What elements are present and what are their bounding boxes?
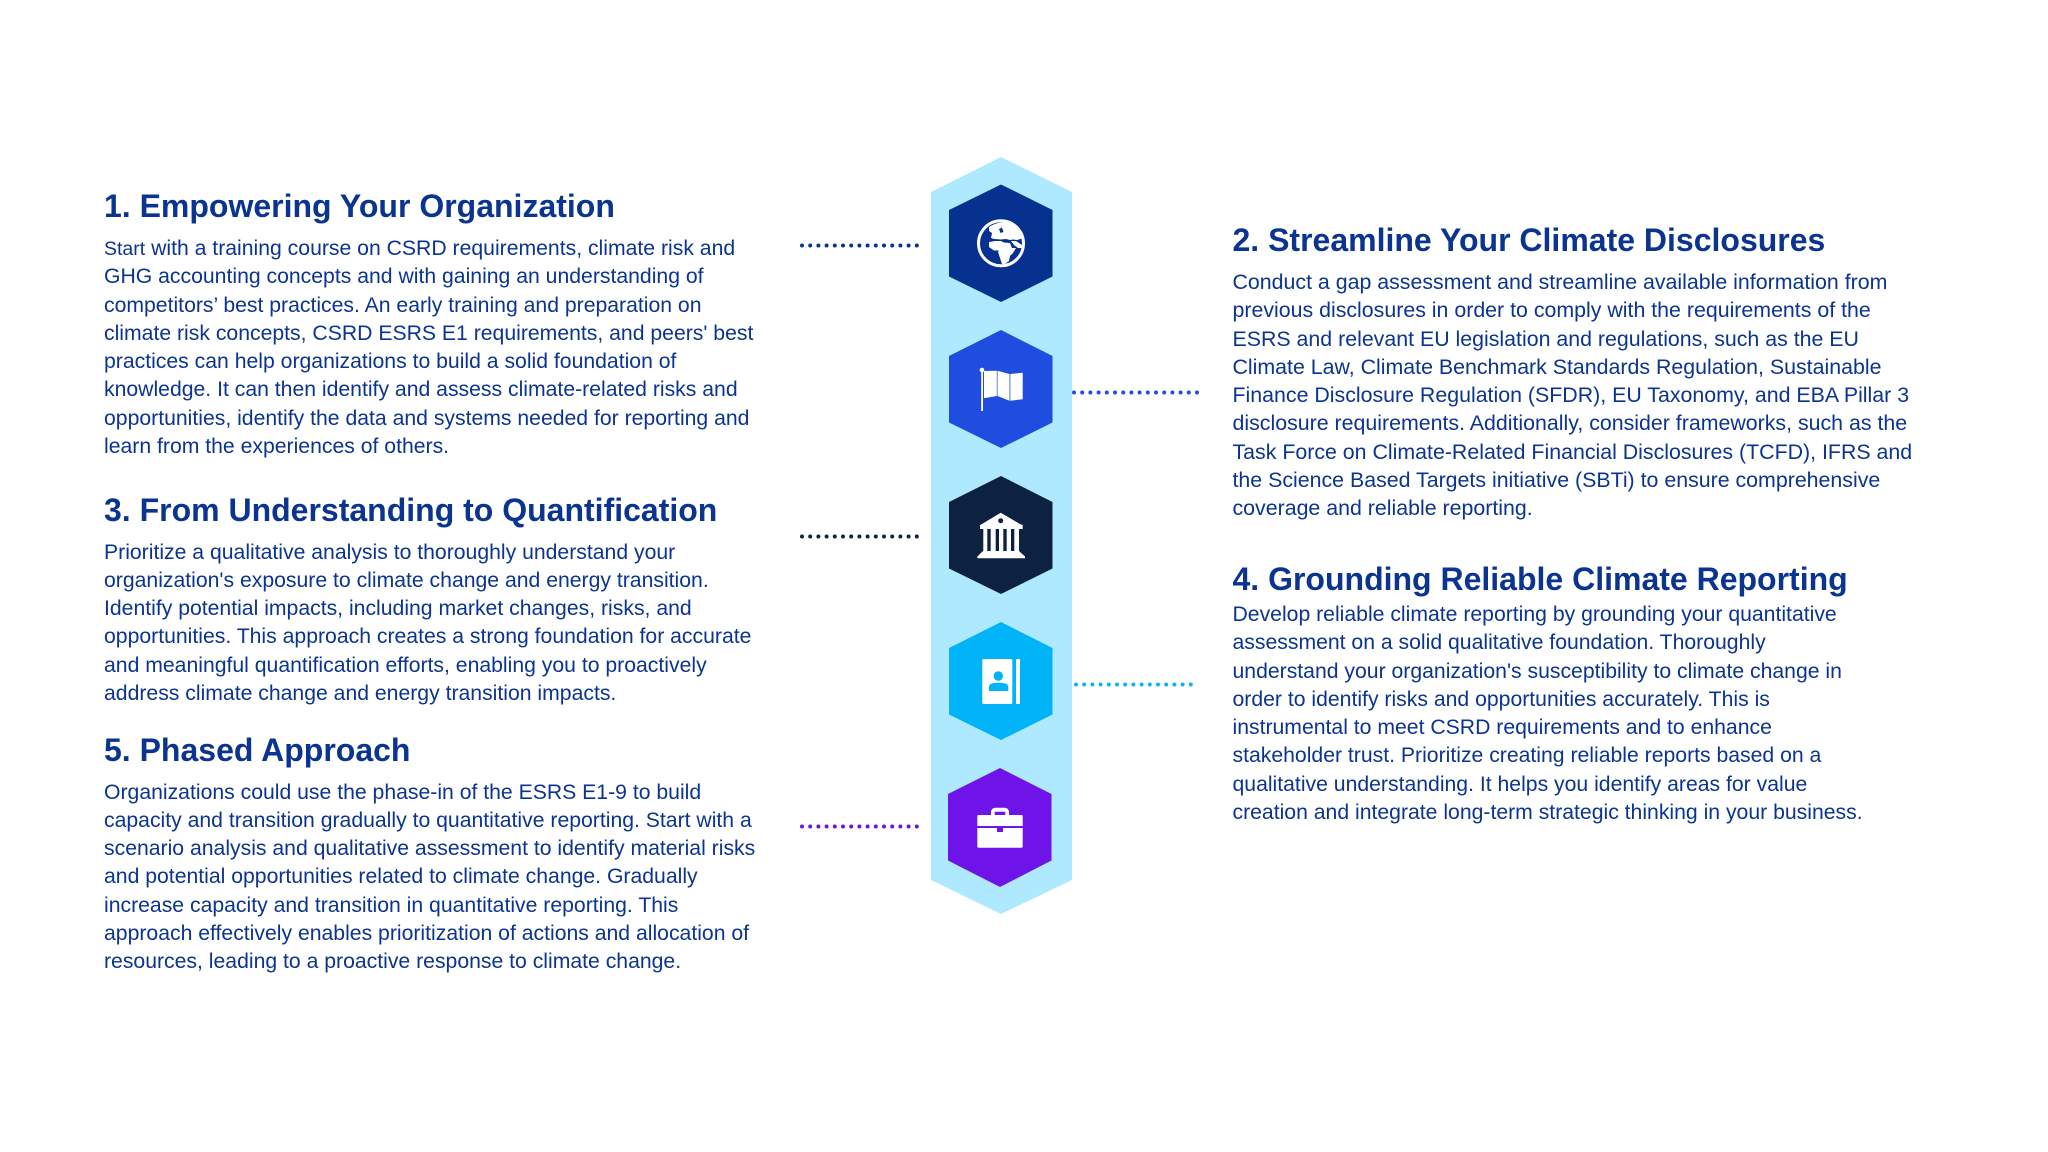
hexagon: bank icon — [949, 476, 1052, 594]
text: section 1 body: opportunities, identify the data and systems needed for reporting and — [104, 406, 749, 430]
text: section 5 body: approach effectively enables prioritization of actions and allocation of — [104, 922, 749, 945]
text: section 2 body: the Science Based Targets initiative (SBTi) to ensure comprehensive — [1232, 468, 1880, 492]
text: section 5 body: capacity and transition gradually to quantitative reporting. Start with a — [104, 809, 752, 832]
dotted connector: section 2 — [1074, 390, 1201, 394]
hexagon: globe icon — [949, 184, 1052, 302]
text: section 2 body: disclosure requirements. Additionally, consider frameworks, such as the — [1232, 411, 1907, 435]
text: section 4 body — [1232, 603, 1863, 824]
text: section 5 body: scenario analysis and qualitative assessment to identify material risks — [104, 837, 755, 860]
text: section 3 body — [104, 540, 751, 705]
text: section 5 body — [104, 780, 755, 973]
text: section 2 body: previous disclosures in order to comply with the requirements of the — [1232, 298, 1871, 322]
text: section 3 body: opportunities. This approach creates a strong foundation for accurate — [104, 625, 751, 648]
dotted connector: section 3 — [802, 534, 917, 538]
text: section 5 body: resources, leading to a proactive response to climate change. — [104, 950, 681, 973]
text: section 4 body: stakeholder trust. Prioritize creating reliable reports based on a — [1232, 744, 1821, 767]
text: section 5 body: Organizations could use the phase-in of the ESRS E1-9 to build — [104, 780, 701, 804]
text: section 3 body: organization's exposure to climate change and energy transition. — [104, 569, 709, 592]
text: section 2 body: Conduct a gap assessment and streamline available information from — [1232, 270, 1887, 294]
text: section 1 body: climate risk concepts, CSRD ESRS E1 requirements, and peers' best — [104, 322, 753, 345]
text: section 4 body: understand your organization's susceptibility to climate change in — [1232, 660, 1842, 682]
text: section 4 body: instrumental to meet CSRD requirements and to enhance — [1232, 716, 1772, 739]
dotted connector: section 5 — [802, 824, 917, 828]
text: section 4 body: order to identify risks and opportunities accurately. This is — [1232, 688, 1770, 711]
heading: section 1: 1. Empowering Your Organization — [104, 188, 615, 224]
text: section 4 body: Develop reliable climate reporting by grounding your quantitative — [1232, 603, 1837, 626]
hexagon: address book icon — [949, 622, 1052, 740]
text: section 1 body: Start with a training course on CSRD requirements, climate risk and — [104, 237, 735, 260]
text: section 4 body: creation and integrate long-term strategic thinking in your business. — [1232, 801, 1863, 824]
text: section 2 body: coverage and reliable reporting. — [1232, 496, 1533, 520]
heading: section 4: 4. Grounding Reliable Climate Reporting — [1232, 561, 1848, 597]
text: section 4 body: qualitative understanding. It helps you identify areas for value — [1232, 772, 1807, 796]
text: section 1 body: practices can help organizations to build a solid foundation of — [104, 350, 676, 373]
hexagon: briefcase icon — [948, 768, 1052, 887]
text: section 2 body — [1232, 270, 1912, 520]
text: section 2 body: ESRS and relevant EU legislation and regulations, such as the EU — [1232, 326, 1859, 350]
text: section 2 body: Climate Law, Climate Benchmark Standards Regulation, Sustainable — [1232, 355, 1881, 379]
dotted connector: section 1 — [802, 244, 917, 248]
text: section 1 body: knowledge. It can then identify and assess climate-related risks and — [104, 378, 738, 401]
background band — [931, 157, 1072, 914]
text: section 5 body: increase capacity and transition in quantitative reporting. This — [104, 894, 678, 916]
heading: section 5: 5. Phased Approach — [104, 732, 410, 768]
text: section 3 body: Prioritize a qualitative analysis to thoroughly understand your — [104, 540, 675, 564]
text: section 3 body: address climate change and energy transition impacts. — [104, 682, 616, 705]
heading: section 3: 3. From Understanding to Quantification — [104, 492, 717, 528]
text: section 4 body: assessment on a solid qualitative foundation. Thoroughly — [1232, 631, 1766, 654]
text: section 3 body: and meaningful quantification efforts, enabling you to proactively — [104, 654, 707, 676]
text: section 1 body: GHG accounting concepts and with gaining an understanding of — [104, 265, 704, 288]
text: section 1 body: competitors’ best practices. An early training and preparation on — [104, 294, 702, 316]
hexagon: flag icon — [949, 330, 1052, 448]
heading: section 2: 2. Streamline Your Climate Disclosures — [1232, 222, 1825, 258]
text: section 2 body: Task Force on Climate-Related Financial Disclosures (TCFD), IFRS and — [1232, 440, 1912, 464]
text: section 1 body — [104, 237, 754, 458]
text: section 3 body: Identify potential impacts, including market changes, risks, and — [104, 597, 692, 620]
text: section 2 body: Finance Disclosure Regulation (SFDR), EU Taxonomy, and EBA Pillar 3 — [1232, 383, 1909, 407]
text: section 5 body: and potential opportunities related to climate change. Gradually — [104, 865, 698, 888]
text: section 1 body: learn from the experiences of others. — [104, 435, 449, 458]
dotted connector: section 4 — [1076, 682, 1196, 686]
